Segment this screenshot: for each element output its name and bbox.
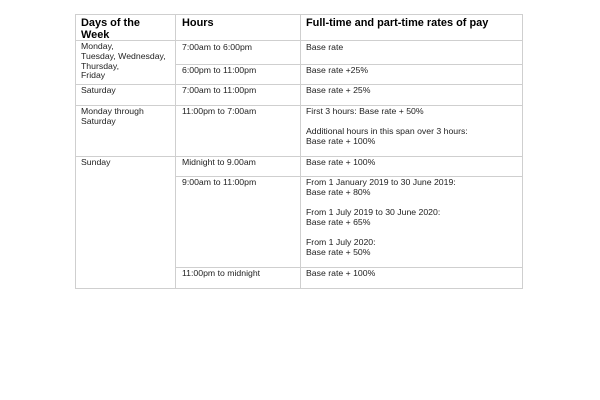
weekdays label: Monday, (81, 41, 114, 51)
weekday evening hours: 6:00pm to 11:00pm (182, 65, 256, 75)
weekday daytime rate: Base rate (306, 42, 343, 52)
weekday evening rate: Base rate +25% (306, 65, 368, 75)
header: days of the week: Days of the (81, 17, 140, 29)
sunday late rate: Base rate + 100% (306, 268, 375, 278)
sunday early rate: Base rate + 100% (306, 157, 375, 167)
sunday early hours: Midnight to 9.00am (182, 157, 256, 167)
saturday rate: Base rate + 25% (306, 85, 370, 95)
pay rates table (75, 14, 523, 289)
sunday label: Sunday (81, 157, 110, 167)
sunday day rates: From 1 July 2019 to 30 June 2020: (306, 207, 440, 217)
sunday day rates: From 1 July 2020: (306, 237, 376, 247)
sunday late hours: 11:00pm to midnight (182, 268, 260, 278)
weekdays label (81, 41, 166, 80)
saturday label: Saturday (81, 85, 116, 95)
header: days of the week (81, 17, 140, 41)
sunday day rates: From 1 January 2019 to 30 June 2019: (306, 177, 456, 187)
sunday day hours: 9:00am to 11:00pm (182, 177, 256, 187)
overnight rates (306, 106, 468, 146)
sunday day rates: Base rate + 65% (306, 217, 370, 227)
weekday daytime hours: 7:00am to 6:00pm (182, 42, 252, 52)
sunday day rates: Base rate + 50% (306, 247, 370, 257)
weekdays label: Friday (81, 70, 105, 80)
header: hours: Hours (182, 17, 214, 29)
monday through saturday label: Saturday (81, 116, 116, 126)
header: rates of pay: Full-time and part-time rates of pay (306, 17, 488, 29)
overnight rates: First 3 hours: Base rate + 50% (306, 106, 424, 116)
weekdays label: Thursday, (81, 61, 119, 71)
sunday day rates: Base rate + 80% (306, 187, 370, 197)
saturday hours: 7:00am to 11:00pm (182, 85, 256, 95)
sunday day rates (306, 177, 456, 257)
overnight rates: Additional hours in this span over 3 hours: (306, 126, 468, 136)
monday through saturday label: Monday through (81, 106, 144, 116)
overnight hours: 11:00pm to 7:00am (182, 106, 256, 116)
header: days of the week: Week (81, 29, 109, 41)
monday through saturday label (81, 106, 144, 126)
overnight rates: Base rate + 100% (306, 136, 375, 146)
weekdays label: Tuesday, Wednesday, (81, 51, 166, 61)
